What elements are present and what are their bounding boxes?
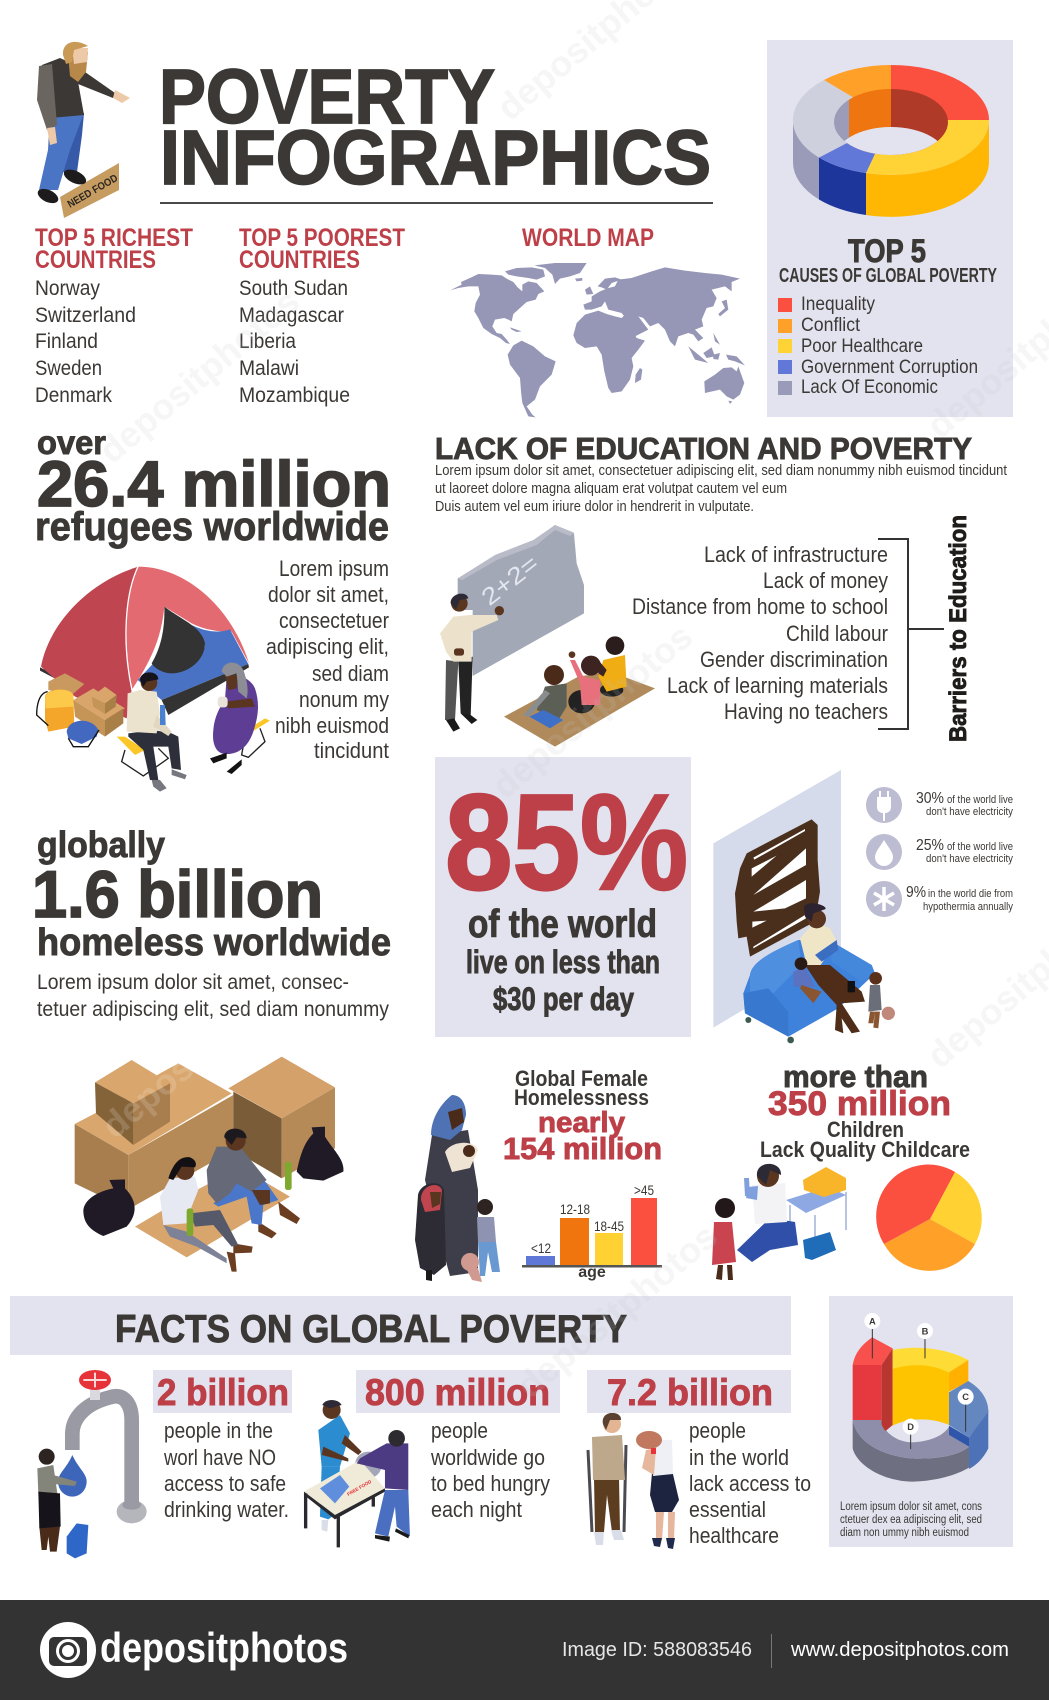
heading: lack of education and poverty: Duis autem vel eum iriure dolor in hendrerit in vulputate.	[435, 498, 754, 515]
text: children lack quality childcare: 350 million	[768, 1085, 951, 1123]
text block: refugees lorem: nibh euismod	[275, 713, 389, 738]
list: top 5 poorest countries: Malawi	[239, 357, 299, 380]
legend: Conflict	[801, 315, 861, 336]
text: children lack quality childcare: Children	[827, 1117, 904, 1142]
watermark: depositphotos	[91, 280, 307, 471]
list: top 5 poorest countries: Mozambique	[239, 384, 350, 407]
panel: 85 percent	[435, 757, 691, 1037]
panel: top 5 causes of global poverty	[767, 40, 1013, 417]
text: children lack quality childcare: more than	[783, 1059, 928, 1094]
stat: 800 million: 800 million	[365, 1372, 550, 1413]
icon row: electricity, water, cold statistics: don't have electricity	[926, 853, 1013, 865]
icon row: electricity, water, cold statistics: hypothermia annually	[923, 901, 1013, 913]
heading: world map: WORLD MAP	[522, 224, 654, 252]
icon row: electricity, water, cold statistics	[866, 787, 1013, 917]
chart: 3D ring with segments A to D: D	[907, 1422, 914, 1432]
text: global female homelessness: nearly	[538, 1107, 625, 1139]
stat: 2 billion: drinking water.	[164, 1497, 289, 1522]
stat: 7.2 billion: lack access to	[689, 1471, 811, 1496]
icon row: electricity, water, cold statistics: of the world live	[947, 794, 1013, 806]
panel: segmented ring chart: ctetuer dex ea adipiscing elit, sed	[840, 1514, 982, 1526]
panel: 85 percent: live on less than	[466, 944, 660, 980]
panel: 85 percent: 85%	[445, 766, 688, 918]
stat: 7.2 billion	[587, 1370, 811, 1548]
list: top 5 richest countries: COUNTRIES	[35, 246, 156, 274]
legend: Inequality	[801, 294, 875, 315]
illustration: man on crutches and sick woman	[588, 1413, 679, 1549]
stat: 2 billion	[153, 1370, 292, 1522]
list: top 5 poorest countries: Madagascar	[239, 304, 344, 327]
legend: Government Corruption	[801, 357, 978, 378]
title: POVERTY	[159, 54, 495, 140]
text: global female homelessness: Homelessness	[514, 1085, 649, 1110]
heading: lack of education and poverty: LACK OF EDUCATION AND POVERTY	[435, 431, 972, 466]
list: top 5 poorest countries: COUNTRIES	[239, 246, 360, 274]
text block: refugees lorem: sed diam	[312, 661, 389, 686]
list: barriers to education	[632, 542, 888, 724]
icon: plug	[866, 787, 902, 823]
bar chart: homelessness by age	[522, 1182, 662, 1281]
bar chart: homelessness by age: <12	[531, 1240, 551, 1256]
text block: refugees lorem: nonum my	[299, 687, 389, 712]
illustration: water tap with child	[37, 1370, 147, 1558]
illustration: homeless couple with boxes	[75, 1057, 343, 1272]
text block: refugees lorem: Lorem ipsum	[279, 556, 389, 581]
illustration: food volunteer and recipient	[304, 1400, 410, 1547]
stat: 7.2 billion: healthcare	[689, 1523, 779, 1548]
panel: top 5 causes of global poverty: TOP 5	[848, 233, 926, 269]
heading: lack of education and poverty: ut laoreet dolore magna aliquam erat volutpat cautem vel eum	[435, 480, 787, 497]
chart: 3D ring with segments A to D: A	[869, 1316, 876, 1326]
pie chart: childcare	[876, 1165, 982, 1271]
bar chart: homelessness by age: 18-45	[594, 1218, 624, 1234]
list: top 5 richest countries: Denmark	[35, 384, 112, 407]
stat: 2 billion: 2 billion	[157, 1372, 289, 1413]
stat: 800 million: worldwide go	[430, 1445, 545, 1470]
illustration: mother with children	[415, 1095, 500, 1282]
title: INFOGRAPHICS	[160, 115, 711, 201]
bar chart: homelessness by age: 12-18	[560, 1201, 590, 1217]
icon: snowflake	[866, 881, 902, 917]
list: top 5 richest countries	[35, 224, 193, 407]
illustration: tent with refugees	[37, 566, 270, 792]
heading bar: facts on global poverty: FACTS ON GLOBAL POVERTY	[115, 1308, 627, 1351]
list: barriers to education: Having no teachers	[724, 699, 888, 724]
stat: refugees	[35, 424, 391, 549]
list: top 5 poorest countries: Liberia	[239, 330, 296, 353]
stat: 800 million: people	[431, 1418, 488, 1443]
heading: lack of education and poverty	[435, 431, 1008, 515]
stat: 7.2 billion: in the world	[689, 1445, 789, 1470]
icon row: electricity, water, cold statistics: 9%	[906, 884, 926, 901]
list: top 5 richest countries: Finland	[35, 330, 98, 353]
footer bar	[0, 1600, 1049, 1700]
bracket and vertical label: barriers to education	[878, 515, 972, 742]
text: global female homelessness: Global Female	[515, 1066, 648, 1091]
text block: refugees lorem	[266, 556, 389, 763]
stat: 7.2 billion: 7.2 billion	[607, 1372, 773, 1413]
illustration: family on sofa by boarded window	[713, 770, 895, 1043]
heading bar: facts on global poverty	[10, 1296, 791, 1355]
text: global female homelessness: 154 million	[503, 1131, 662, 1166]
panel: segmented ring chart	[829, 1296, 1013, 1547]
stat: 800 million: each night	[431, 1497, 522, 1522]
stat: homeless	[32, 824, 391, 1021]
stat: homeless: Lorem ipsum dolor sit amet, consec-	[37, 971, 349, 994]
panel: segmented ring chart: Lorem ipsum dolor sit amet, cons	[840, 1501, 982, 1513]
panel: 85 percent: $30 per day	[493, 981, 634, 1017]
watermark: depositphotos	[509, 1215, 725, 1406]
text block: refugees lorem: tincidunt	[314, 738, 389, 763]
list: barriers to education: Lack of money	[763, 568, 888, 593]
legend: Lack Of Economic	[801, 377, 938, 398]
illustration: classroom	[440, 525, 655, 747]
list: top 5 richest countries: Norway	[35, 277, 100, 300]
stat: refugees: refugees worldwide	[35, 505, 389, 549]
watermark: depositphotos	[94, 955, 310, 1146]
chart: 3D donut	[793, 65, 989, 217]
legend	[778, 294, 978, 398]
stat: homeless: tetuer adipiscing elit, sed diam nonummy	[37, 998, 389, 1021]
stat: homeless: globally	[37, 824, 165, 865]
text block: refugees lorem: consectetuer	[279, 608, 389, 633]
footer bar: www.depositphotos.com	[790, 1639, 1009, 1661]
icon: depositphotos logo	[40, 1622, 96, 1678]
icon: water drop	[866, 834, 902, 870]
panel: segmented ring chart: diam non ummy nibh euismod	[840, 1527, 969, 1539]
list: barriers to education: Distance from home to school	[632, 594, 888, 619]
icon row: electricity, water, cold statistics: don't have electricity	[926, 806, 1013, 818]
icon: beggar man with need food sign: NEED FOOD	[66, 172, 120, 211]
world map	[450, 263, 745, 417]
list: top 5 richest countries: TOP 5 RICHEST	[35, 224, 193, 252]
list: top 5 poorest countries: TOP 5 POOREST	[239, 224, 405, 252]
chart: 3D ring with segments A to D: B	[922, 1326, 929, 1336]
list: top 5 poorest countries: South Sudan	[239, 277, 348, 300]
icon row: electricity, water, cold statistics: in the world die from	[928, 888, 1013, 900]
list: barriers to education: Child labour	[786, 621, 888, 646]
legend: Poor Healthcare	[801, 336, 923, 357]
bar chart: homelessness by age: >45	[634, 1182, 654, 1198]
stat: 7.2 billion: essential	[689, 1497, 766, 1522]
icon row: electricity, water, cold statistics: 25%	[916, 837, 944, 854]
list: barriers to education: Gender discrimination	[700, 647, 888, 672]
list: top 5 richest countries: Switzerland	[35, 304, 136, 327]
list: top 5 richest countries: Sweden	[35, 357, 102, 380]
stat: 2 billion: worl have NO	[163, 1445, 276, 1470]
title	[159, 54, 713, 204]
chart: 3D ring with segments A to D	[853, 1313, 988, 1482]
bar chart: homelessness by age: age	[578, 1264, 606, 1281]
stat: refugees: 26.4 million	[37, 448, 391, 520]
illustration: nurse with child	[712, 1164, 846, 1280]
watermark	[91, 0, 1049, 1406]
illustration: classroom: 2+2=	[476, 550, 544, 611]
stat: 800 million: to bed hungry	[431, 1471, 550, 1496]
illustration: food volunteer and recipient: FREE FOOD	[346, 1479, 373, 1497]
list: barriers to education: Lack of infrastructure	[704, 542, 888, 567]
icon row: electricity, water, cold statistics: 30%	[916, 790, 944, 807]
watermark: depositphotos	[484, 615, 700, 806]
footer bar: Image ID: 588083546	[562, 1639, 752, 1661]
icon row: electricity, water, cold statistics: of the world live	[947, 841, 1013, 853]
stat: 7.2 billion: people	[689, 1418, 746, 1443]
text block: refugees lorem: dolor sit amet,	[268, 582, 389, 607]
text: global female homelessness	[503, 1066, 662, 1166]
list: barriers to education: Lack of learning materials	[667, 673, 888, 698]
panel: 85 percent: of the world	[468, 903, 657, 946]
icon: beggar man with need food sign	[35, 42, 130, 218]
stat: 800 million	[356, 1370, 560, 1522]
stat: homeless: 1.6 billion	[32, 857, 323, 931]
stat: homeless: homeless worldwide	[37, 922, 391, 964]
chart: 3D ring with segments A to D: C	[962, 1392, 969, 1402]
text: children lack quality childcare	[760, 1059, 970, 1162]
text block: refugees lorem: adipiscing elit,	[266, 634, 389, 659]
stat: refugees: over	[37, 424, 106, 461]
stat: 2 billion: people in the	[164, 1418, 273, 1443]
bracket and vertical label: barriers to education: Barriers to Education	[945, 515, 972, 742]
stat: 2 billion: access to safe	[164, 1471, 286, 1496]
text: children lack quality childcare: Lack Quality Childcare	[760, 1137, 970, 1162]
list: top 5 poorest countries	[239, 224, 405, 407]
footer bar: depositphotos	[100, 1624, 348, 1671]
